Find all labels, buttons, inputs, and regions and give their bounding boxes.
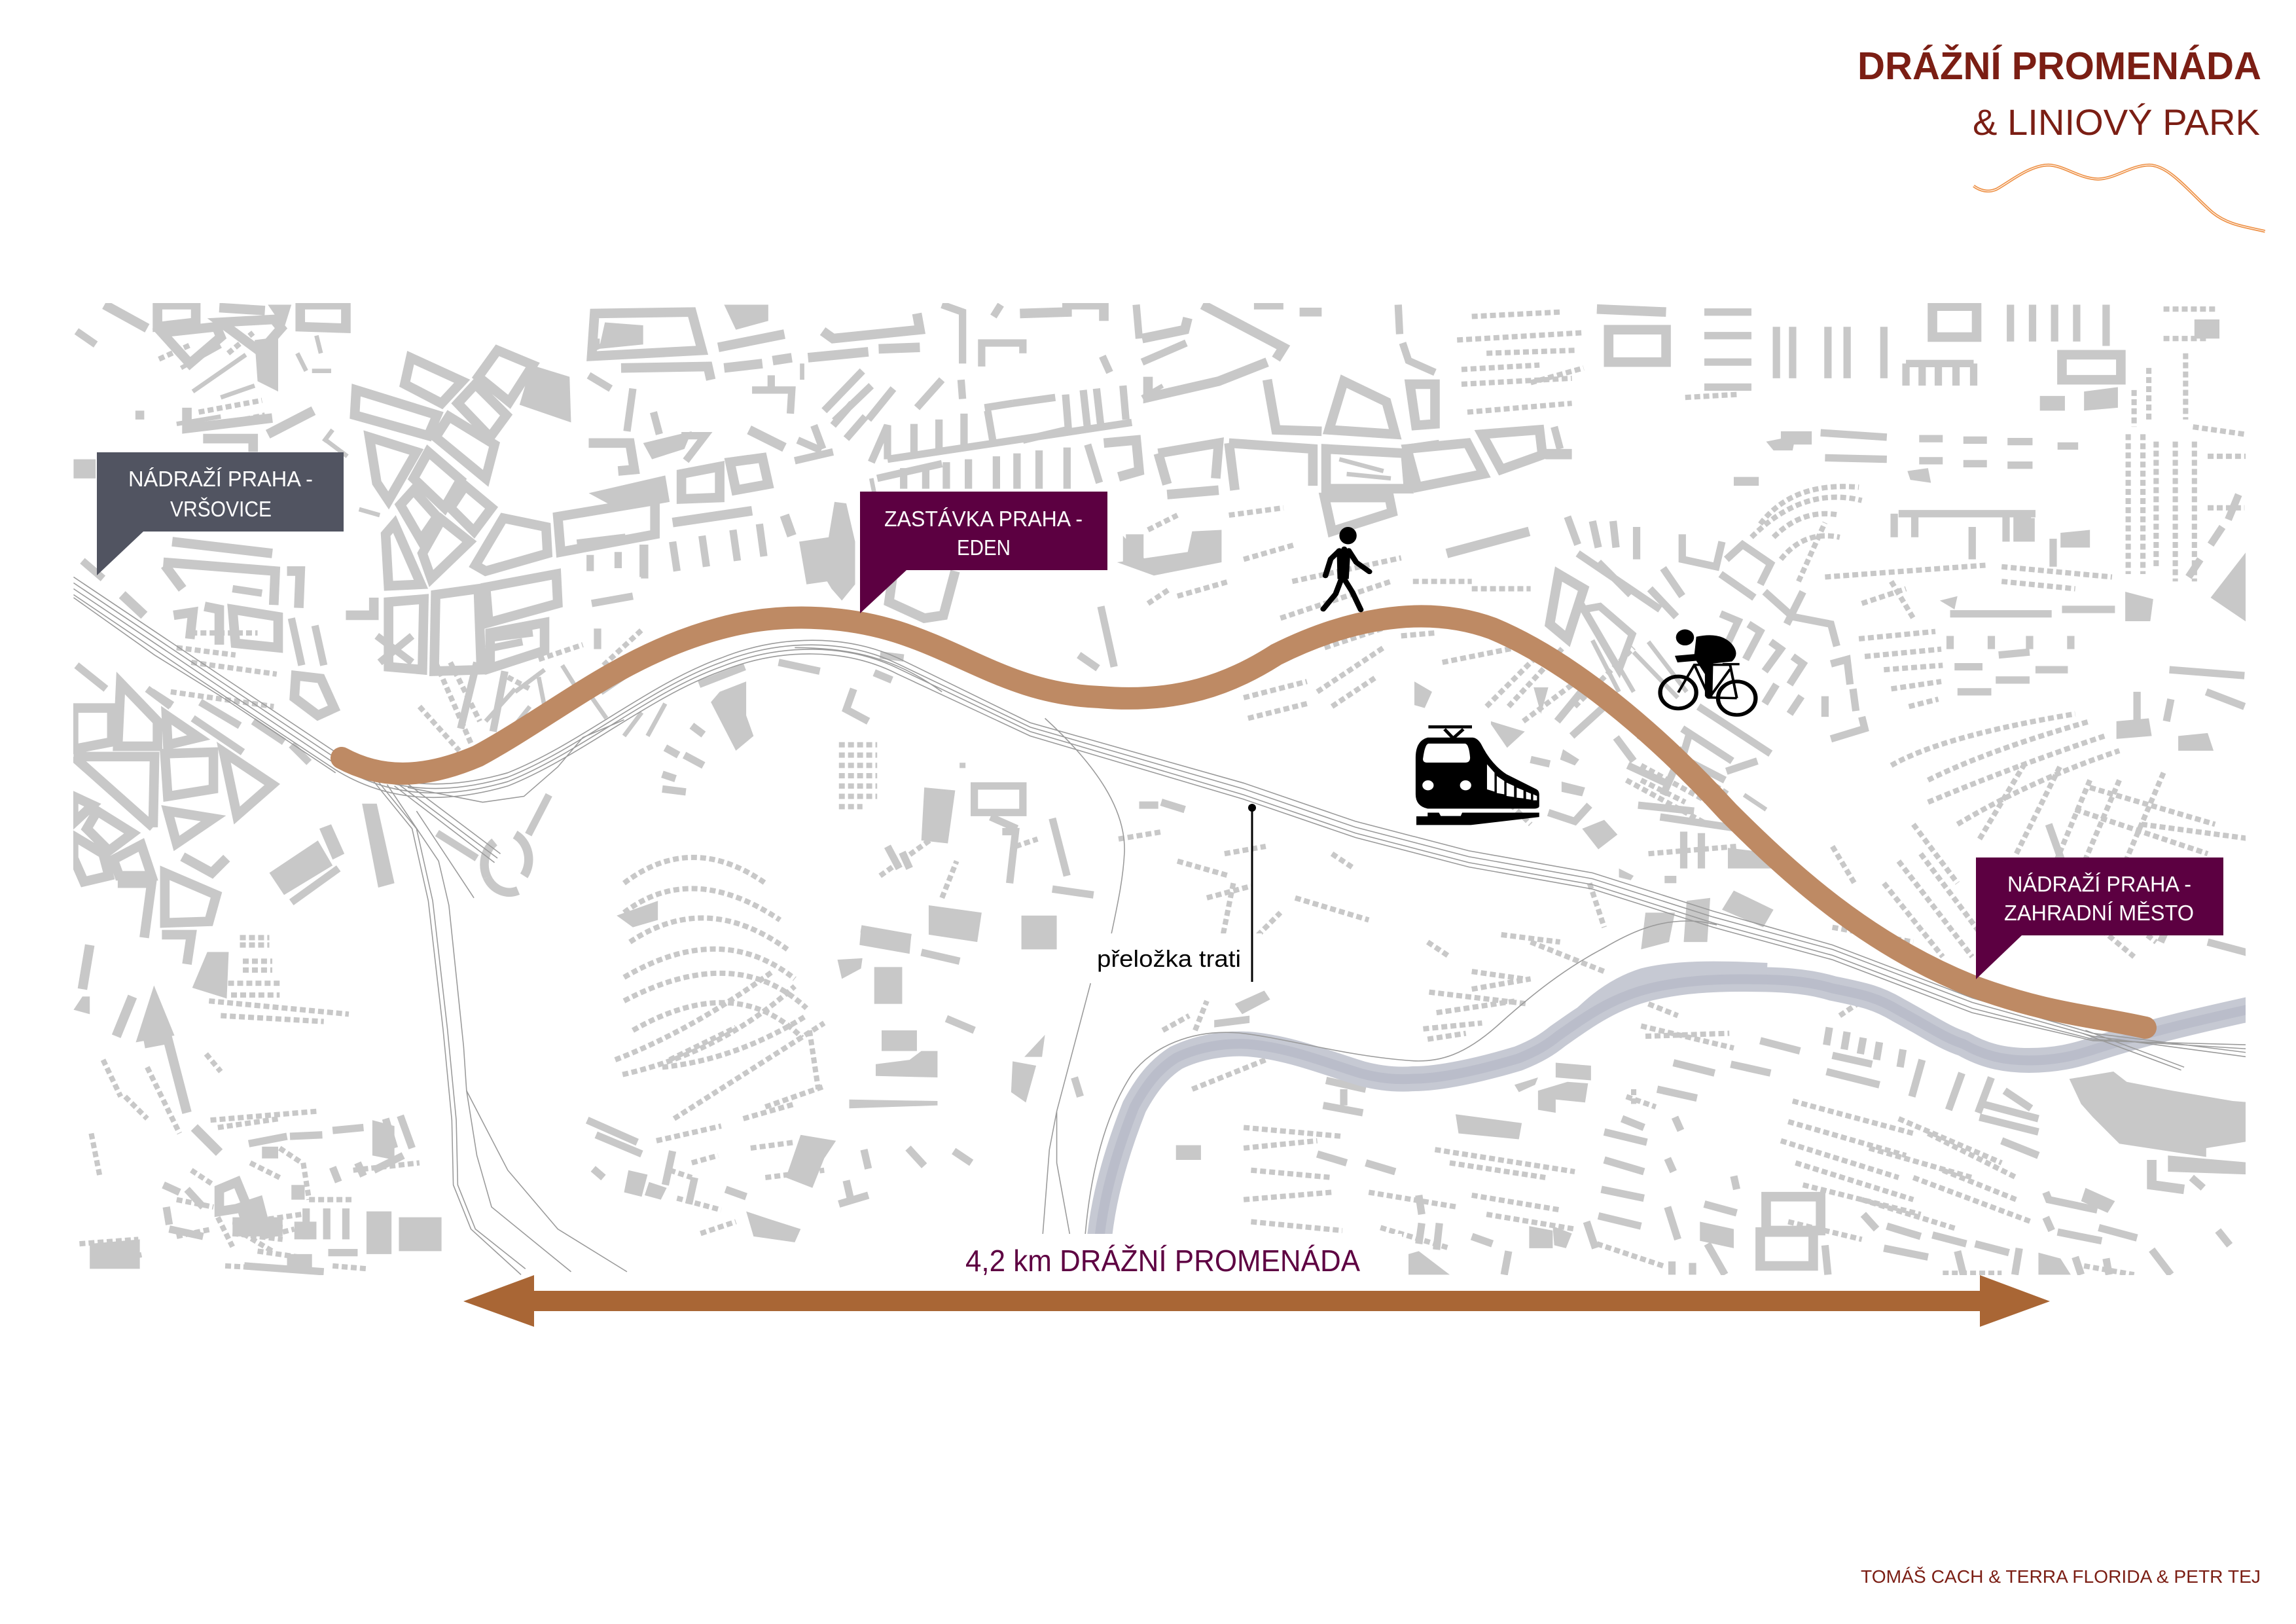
title xyxy=(1857,44,2261,143)
rotunda at junction xyxy=(484,835,529,892)
label: Nádraží Praha - Zahradní Město: ZAHRADNÍ MĚSTO xyxy=(2004,901,2194,925)
label: Nádraží Praha - Zahradní Město xyxy=(1976,857,2223,979)
arrow: route length xyxy=(463,1275,2050,1327)
promenade route xyxy=(342,616,2145,1028)
icon: route wave logo xyxy=(1973,165,2265,231)
white masks around lower text xyxy=(892,933,1402,1280)
label: Nádraží Praha - Vršovice: VRŠOVICE xyxy=(170,497,272,521)
label: Zastávka Praha - Eden: ZASTÁVKA PRAHA - xyxy=(884,507,1083,531)
map: building footprints, river and rail tracks xyxy=(73,304,2291,1283)
label: Nádraží Praha - Vršovice xyxy=(97,452,344,575)
icon: train xyxy=(1416,727,1539,825)
label: Nádraží Praha - Vršovice: NÁDRAŽÍ PRAHA - xyxy=(128,467,313,491)
icon: pedestrian xyxy=(1323,527,1369,609)
annotation: přeložka trati xyxy=(1097,804,1256,982)
label: Nádraží Praha - Zahradní Město: NÁDRAŽÍ PRAHA - xyxy=(2007,872,2191,896)
credits: TOMÁŠ CACH & TERRA FLORIDA & PETR TEJ xyxy=(1861,1566,2261,1587)
rows of small houses xyxy=(79,309,2252,1274)
heading: route length: 4,2 km DRÁŽNÍ PROMENÁDA xyxy=(965,1244,1360,1278)
buildings xyxy=(73,304,2253,1274)
dense strips xyxy=(177,331,1766,810)
rail tracks xyxy=(73,577,2258,1274)
icon: cyclist xyxy=(1660,630,1755,715)
title: & LINIOVÝ PARK xyxy=(1973,101,2260,143)
annotation: přeložka trati: přeložka trati xyxy=(1097,945,1241,972)
river xyxy=(1088,961,2246,1234)
label: Zastávka Praha - Eden: EDEN xyxy=(957,535,1011,560)
title: DRÁŽNÍ PROMENÁDA xyxy=(1857,44,2261,88)
slabs xyxy=(77,304,2253,1274)
solid large footprints xyxy=(73,304,2252,1274)
label: Zastávka Praha - Eden xyxy=(860,492,1107,613)
